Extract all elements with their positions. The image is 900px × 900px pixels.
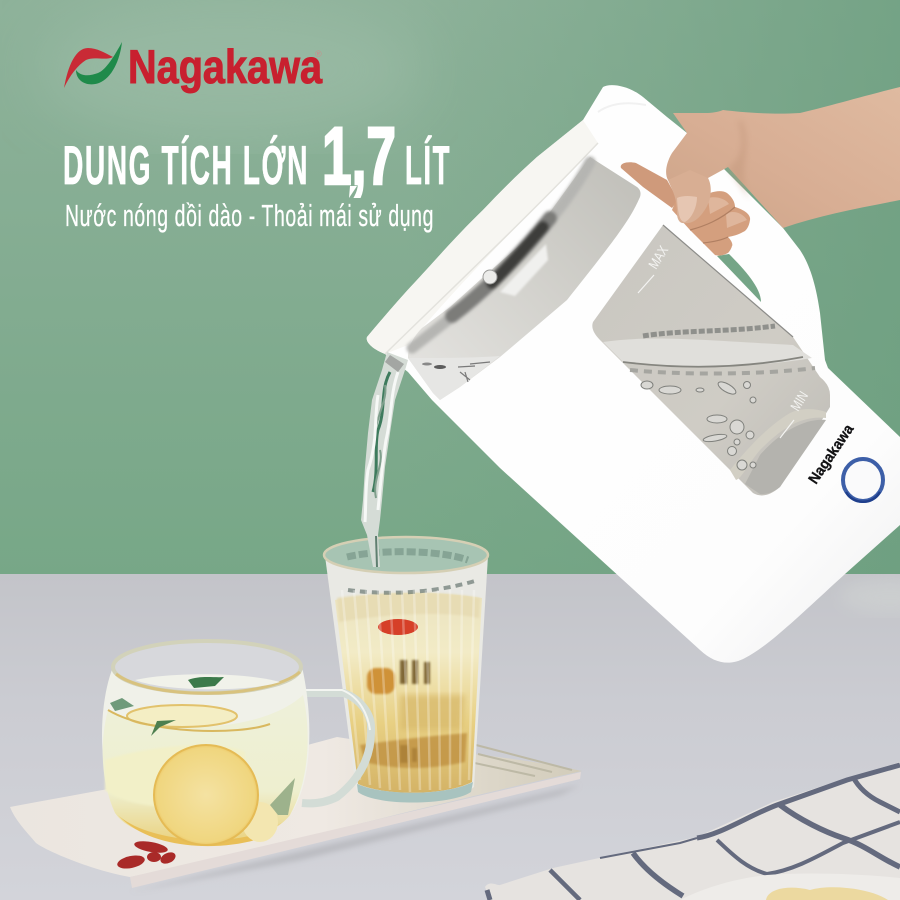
thumb nail (677, 196, 697, 222)
tea towel (485, 762, 900, 900)
kettle body (367, 85, 900, 663)
MAX mark (638, 242, 672, 293)
wordmark: Nagakawa (128, 40, 323, 93)
MIN mark (780, 388, 811, 438)
kettle lid (367, 103, 646, 354)
headline: DUNG TÍCH LỚN (63, 134, 309, 196)
stainless steel rim (412, 162, 590, 348)
MIN mark: MIN (787, 388, 811, 414)
glass mug with lemon (102, 641, 371, 846)
power button (843, 459, 883, 502)
logo mark (64, 42, 122, 88)
lid knob (483, 270, 497, 284)
palm crease (728, 120, 750, 200)
goji berries (116, 839, 177, 871)
green wall background (0, 0, 900, 576)
table surface (0, 574, 900, 900)
upper glass panel (408, 157, 641, 400)
light patch behind rim (500, 244, 548, 296)
index finger (621, 162, 678, 208)
water level in upper glass (408, 356, 500, 400)
tall ribbed glass (324, 537, 488, 802)
curled fingers (672, 191, 750, 256)
hand holding handle (621, 87, 900, 256)
Nagakawa logo (64, 40, 323, 93)
headline (63, 111, 451, 202)
green gap in handle (717, 254, 761, 302)
tray (10, 737, 582, 892)
headline: LÍT (405, 134, 451, 196)
MAX mark: MAX (645, 242, 672, 272)
brand on kettle: Nagakawa (805, 421, 858, 487)
water window (592, 225, 830, 495)
arm and palm (666, 87, 900, 228)
water stream (361, 352, 408, 567)
plate with food (680, 874, 900, 900)
registered mark: ® (315, 49, 322, 59)
subheading: Nước nóng dồi dào - Thoải mái sử dụng (65, 198, 434, 233)
thumb (668, 170, 711, 223)
headline: 1,7 (322, 111, 396, 202)
